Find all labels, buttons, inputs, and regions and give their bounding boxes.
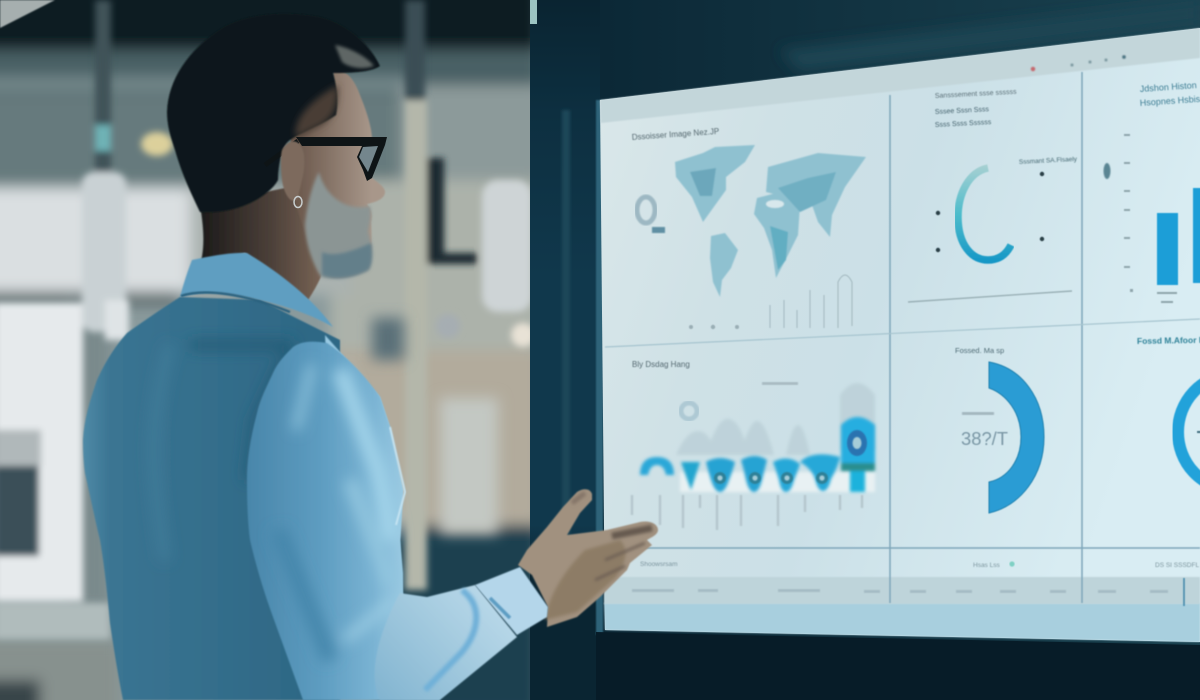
gauge arc xyxy=(958,168,1011,260)
map axis ticks xyxy=(689,325,739,329)
collar fold shadow xyxy=(181,293,290,312)
dashboard screen xyxy=(600,28,1200,642)
sleeve highlights xyxy=(278,365,395,660)
dim wall patch xyxy=(372,318,404,360)
earring xyxy=(294,196,302,208)
beard lower tone xyxy=(322,243,372,278)
neck xyxy=(200,185,328,300)
globe label xyxy=(652,227,665,233)
ceiling corner xyxy=(0,0,55,28)
hair highlight xyxy=(335,45,374,68)
gauge axis xyxy=(908,291,1072,302)
bar chart axis labels xyxy=(1124,134,1177,303)
panel: radial gauge xyxy=(908,89,1078,302)
bar chart title: Jdshon Histon xyxy=(1139,80,1197,94)
panel: world map xyxy=(632,127,866,329)
glasses xyxy=(296,137,387,181)
face xyxy=(290,70,385,278)
funnel highlights xyxy=(717,437,862,481)
gauge title text xyxy=(935,89,1017,129)
gauge dots xyxy=(936,172,1044,252)
screen grid dividers xyxy=(605,72,1200,606)
pale background shapes xyxy=(676,383,875,455)
person xyxy=(83,14,658,700)
bottom data row xyxy=(604,577,1200,604)
footer labels: DS SI SSSDFL xyxy=(1155,562,1199,569)
icon chart caption xyxy=(762,382,798,385)
panel: footer table xyxy=(632,561,1199,593)
torso front xyxy=(325,335,403,660)
faint axis labels xyxy=(632,495,862,530)
sleeve xyxy=(247,342,440,700)
map title: Dssoisser Image Nez.JP xyxy=(632,127,720,142)
pale columns xyxy=(440,398,498,534)
bottom glow band xyxy=(604,603,1200,642)
blurred office background xyxy=(0,0,540,700)
forearm fold xyxy=(425,590,476,690)
gauge label: Sssmant SA.Flsaely xyxy=(1019,156,1078,166)
back fold shading xyxy=(154,345,292,560)
panel: half-ring gauge xyxy=(955,346,1044,513)
ring centre mark xyxy=(1197,431,1200,433)
half-ring arc xyxy=(989,362,1044,513)
icon chart title: Bly Dsdag Hang xyxy=(632,360,690,369)
torso shirt back xyxy=(83,297,340,700)
indicator icon xyxy=(1104,163,1110,179)
footer labels: Shoowsrsam xyxy=(640,561,678,568)
blue funnel markers xyxy=(640,417,875,492)
panel: icon chart xyxy=(632,360,875,530)
thin column sparkline xyxy=(770,275,852,328)
small globe xyxy=(637,197,655,223)
finger shadows xyxy=(572,493,652,580)
forearm xyxy=(375,585,517,700)
ring icon xyxy=(681,403,697,419)
blue bars xyxy=(1157,188,1200,285)
ring arc xyxy=(1178,375,1200,489)
hair xyxy=(167,14,380,212)
half-ring small label xyxy=(962,412,994,415)
hair temple fade xyxy=(295,85,338,138)
cuff shadow xyxy=(490,598,510,618)
hand back shading xyxy=(545,540,625,620)
gauge title text: Sansssement ssse ssssss xyxy=(935,89,1017,100)
gauge title text: Sssee Sssn Ssss xyxy=(935,106,990,116)
funnel centres xyxy=(714,430,867,484)
glasses temple arm xyxy=(265,141,298,165)
world map shapes xyxy=(675,145,866,297)
half-ring title: Fossed. Ma sp xyxy=(955,346,1004,355)
hand xyxy=(518,489,658,627)
footer labels xyxy=(640,561,1199,569)
white base band xyxy=(680,472,875,492)
ear xyxy=(281,141,304,201)
panel: ring gauge xyxy=(1137,335,1200,489)
beard xyxy=(305,172,372,279)
ceiling lamp xyxy=(141,132,173,156)
collar xyxy=(180,253,333,327)
footer labels: Hsas Lss xyxy=(973,562,1000,569)
ring title: Fossd M.Afoor I xyxy=(1137,335,1200,346)
gauge title text: Ssss Ssss Ssssss xyxy=(935,119,992,129)
cuff xyxy=(475,567,548,635)
bar chart title xyxy=(1139,80,1200,108)
bar chart title: Hsopnes Hsbis xyxy=(1139,94,1200,108)
footer cells xyxy=(632,589,1168,593)
shirt pocket seam xyxy=(390,427,405,525)
display frame xyxy=(530,0,1200,700)
screen title bar xyxy=(600,28,1200,123)
status dot xyxy=(1009,561,1015,567)
panel: bar chart xyxy=(1104,80,1200,303)
half-ring value: 38?/T xyxy=(961,429,1008,449)
glasses lens xyxy=(359,146,378,172)
